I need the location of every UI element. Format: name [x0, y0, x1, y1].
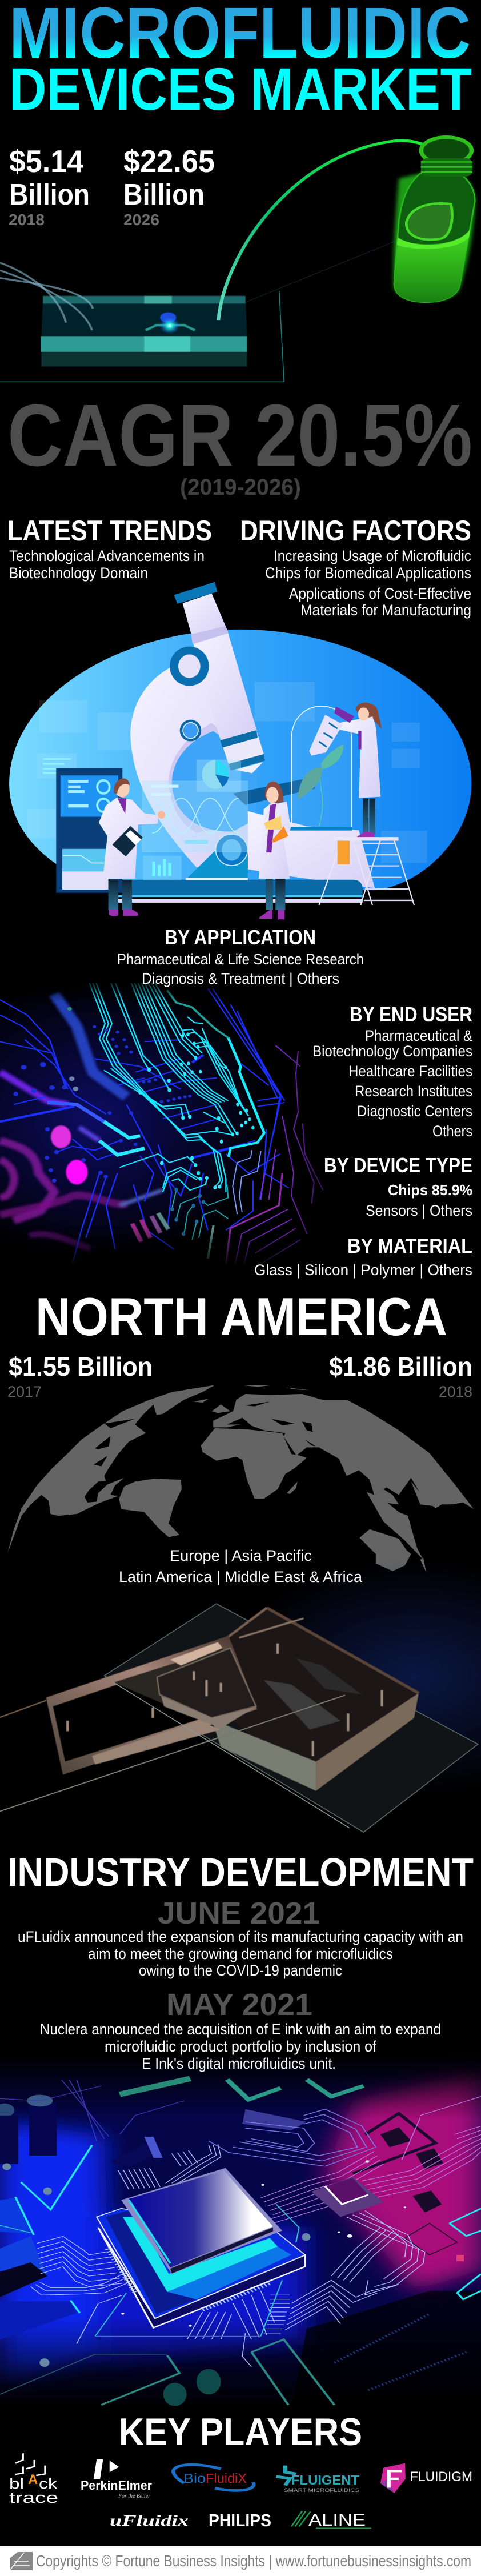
panel: by end user — [312, 1003, 472, 1140]
processor chip — [97, 2168, 305, 2328]
background components — [0, 2095, 460, 2406]
panel: by application: BY APPLICATION — [165, 926, 316, 949]
stat: North America 2018: 2018 — [439, 1383, 472, 1400]
ladder — [319, 838, 414, 905]
photo: transparent microfluidic chips on glass — [0, 1561, 481, 1832]
event: May 2021: MAY 2021 — [166, 1988, 312, 2022]
illustration: processor on circuit board — [0, 2056, 481, 2407]
logo: BioFluidiX — [173, 2465, 254, 2490]
logo: Fluigent: FLUIGENT — [291, 2473, 359, 2487]
illustration: microscope laboratory with scientists — [9, 582, 471, 919]
market value 2018 — [9, 143, 90, 229]
CAGR figure: (2019-2026) — [180, 475, 301, 500]
logo: Blacktrace: bl — [9, 2475, 24, 2492]
panel: by material — [254, 1234, 472, 1279]
panel: by application: Diagnosis & Treatment | Others — [142, 970, 339, 987]
logo: Blacktrace: A — [28, 2472, 38, 2487]
logo: Blacktrace: trace — [9, 2489, 58, 2506]
scientist: woman with folder — [259, 782, 291, 919]
panel: by device type: Sensors | Others — [366, 1202, 472, 1219]
circuit traces — [31, 2144, 425, 2367]
stat: North America 2018 — [329, 1352, 472, 1400]
logo: BioFluidiX: FluidiX — [206, 2471, 247, 2486]
microscope knobs — [170, 647, 209, 742]
panel: by device type: Chips 85.9% — [388, 1181, 472, 1199]
logo: PerkinElmer: PerkinElmer — [81, 2478, 152, 2493]
logo: Philips: PHILIPS — [209, 2510, 271, 2530]
scientist: woman on ladder with bottle — [309, 703, 382, 838]
event: June 2021 — [18, 1896, 463, 1979]
logo: PerkinElmer: For the Better — [118, 2493, 150, 2499]
panel: latest trends: LATEST TRENDS — [7, 515, 212, 547]
logo: Aline — [291, 2510, 371, 2530]
market value 2026: $22.65 — [123, 143, 215, 179]
event: June 2021: aim to meet the growing demand for microfluidics — [88, 1945, 393, 1962]
microscope tube — [174, 582, 265, 773]
text: other regions: Europe | Asia Pacific — [170, 1547, 312, 1564]
text: other regions — [119, 1547, 363, 1585]
panel: driving factors — [240, 515, 471, 619]
front chip — [46, 1636, 257, 1775]
logo: Fluidigm: FLUIDIGM — [410, 2469, 472, 2485]
panel: by material: Glass | Silicon | Polymer | Others — [254, 1261, 472, 1279]
illustration: glowing microfluidic chip and green bottle — [0, 137, 475, 382]
panel: by device type — [324, 1153, 472, 1219]
footer bar — [0, 2546, 481, 2576]
logo: Fluigent — [276, 2466, 359, 2493]
glass dome with plant — [290, 706, 352, 831]
logo: Aline: ALINE — [308, 2510, 366, 2530]
panel: by end user: Others — [432, 1123, 472, 1140]
panel: latest trends: Technological Advancements in — [9, 547, 205, 564]
microscope base — [118, 811, 375, 903]
event: June 2021: owing to the COVID-19 pandemic — [139, 1962, 342, 1979]
event: June 2021: JUNE 2021 — [158, 1896, 320, 1930]
event: May 2021: Nuclera announced the acquisition of E ink with an aim to expand — [40, 2021, 441, 2038]
illustration: neon circuit board — [0, 975, 354, 1272]
icon: Fortune Business Insights logo — [10, 2552, 33, 2570]
logo: BioFluidiX: Bio — [183, 2471, 206, 2486]
stat: North America 2018: $1.86 Billion — [329, 1352, 472, 1381]
stat: North America 2017: $1.55 Billion — [9, 1352, 153, 1381]
world map — [7, 1385, 474, 1573]
title — [9, 0, 472, 123]
microscope stage — [233, 777, 315, 805]
logo: Fluidigm — [380, 2463, 472, 2493]
text: other regions: Latin America | Middle East & Africa — [119, 1568, 363, 1585]
logo: Blacktrace — [9, 2453, 58, 2506]
back chip — [212, 1608, 419, 1791]
panel: latest trends — [7, 515, 212, 582]
small chip — [311, 2177, 383, 2217]
market value 2018: 2018 — [9, 211, 45, 229]
computer console — [56, 768, 122, 893]
panel: by application — [117, 926, 364, 987]
band below circuit — [0, 2406, 481, 2546]
scientist: man with clipboard — [99, 779, 165, 916]
event: May 2021 — [40, 1988, 441, 2072]
market value 2026: 2026 — [123, 211, 159, 229]
microscope arm — [130, 659, 255, 867]
logo: uFluidix: uFluidix — [110, 2512, 189, 2529]
event: May 2021: microfluidic product portfolio by inclusion of — [105, 2038, 376, 2055]
market value 2018: Billion — [9, 178, 90, 211]
logo: Blacktrace: ck — [39, 2475, 58, 2492]
holographic DNA panel — [142, 760, 248, 880]
event: May 2021: E Ink's digital microfluidics unit. — [142, 2055, 336, 2072]
panel: latest trends: Biotechnology Domain — [9, 564, 148, 582]
heading: North America: NORTH AMERICA — [35, 1287, 447, 1347]
panel: industry development — [7, 1850, 474, 2072]
stat: North America 2017 — [7, 1352, 153, 1400]
stat: North America 2017: 2017 — [7, 1383, 42, 1400]
panel: by application: Pharmaceutical & Life Science Research — [117, 951, 364, 968]
market value 2026 — [123, 143, 215, 229]
market value 2026: Billion — [123, 178, 205, 211]
logo: PerkinElmer — [81, 2459, 152, 2499]
logo: Fluigent: SMART MICROFLUIDICS — [284, 2487, 359, 2493]
market value 2018: $5.14 — [9, 143, 83, 179]
heading: key players: KEY PLAYERS — [119, 2410, 362, 2454]
